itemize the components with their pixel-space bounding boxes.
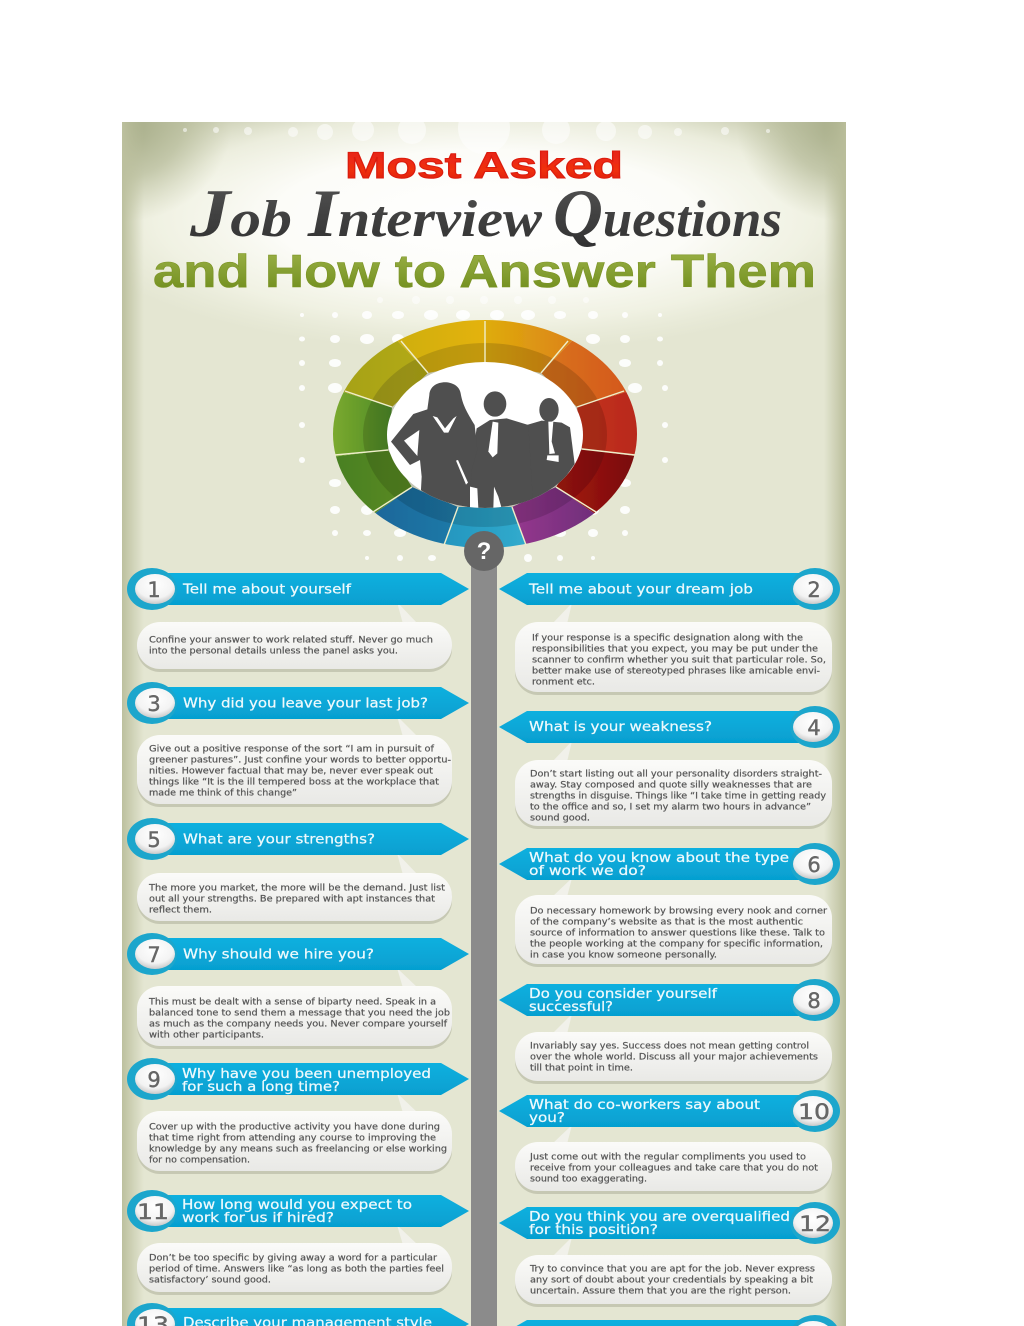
- answer bubble 1: [137, 602, 452, 672]
- answer bubble 11: Don’t be too specific by giving away a word for a particular: [149, 1252, 437, 1264]
- question banner 12: Do you think you are overqualified: [529, 1210, 790, 1225]
- answer bubble 8: [515, 1014, 832, 1084]
- card 7: [127, 933, 469, 1049]
- answer bubble 8: over the whole world. Discuss all your major achievements: [530, 1052, 818, 1062]
- decorative white dot field: [299, 310, 668, 562]
- title: Job Interview Questions: Questions: [553, 175, 782, 251]
- question banner 8: [499, 979, 840, 1021]
- question banner 4: What is your weakness?: [529, 719, 712, 735]
- card 14: [499, 1315, 840, 1326]
- icon: business people silhouettes: [391, 382, 575, 508]
- question banner 11: 11: [137, 1200, 169, 1224]
- answer bubble 6: in case you know someone personally.: [530, 950, 717, 960]
- answer bubble 8: till that point in time.: [530, 1062, 633, 1074]
- answer bubble 2: better make use of stereotyped phrases like amicable envi-: [532, 666, 820, 676]
- answer bubble 4: Don’t start listing out all your personality disorders straight-: [530, 768, 822, 780]
- answer bubble 3: things like “It is the ill tempered boss at the workplace that: [149, 776, 439, 788]
- title: Job Interview Questions: Interview: [307, 175, 542, 251]
- icon: question mark badge: ?: [477, 538, 491, 565]
- answer bubble 3: nities. However factual that may be, never ever speak out: [149, 766, 433, 776]
- question banner 2: 2: [807, 578, 821, 602]
- answer bubble 10: Just come out with the regular compliments you used to: [529, 1152, 806, 1162]
- question banner 6: of work we do?: [529, 864, 646, 879]
- question banner 1: [127, 568, 469, 610]
- question banner 12: for this position?: [529, 1223, 658, 1238]
- answer bubble 9: Cover up with the productive activity you have done during: [149, 1122, 440, 1132]
- answer bubble 2: scanner to confirm whether you suit that particular role. So,: [532, 654, 826, 666]
- question banner 8: 8: [807, 989, 821, 1013]
- question banner 9: Why have you been unemployed: [182, 1067, 431, 1082]
- answer bubble 3: made me think of this change”: [149, 788, 297, 798]
- question banner 14: [499, 1315, 840, 1326]
- card 10: [499, 1090, 840, 1194]
- answer bubble 3: Give out a positive response of the sort “I am in pursuit of: [149, 744, 435, 754]
- answer bubble 4: strengths in disguise. Things like “I take time in getting ready: [530, 790, 827, 802]
- card 3: [127, 682, 469, 807]
- answer bubble 7: [137, 968, 452, 1049]
- answer bubble 4: away. Stay composed and quote silly weaknesses that are: [530, 780, 812, 790]
- answer bubble 2: ronment etc.: [532, 676, 595, 688]
- answer bubble 7: with other participants.: [149, 1030, 264, 1040]
- question banner 6: [499, 843, 840, 885]
- panel: infographic background: [122, 122, 846, 1326]
- answer bubble 8: Invariably say yes. Success does not mean getting control: [530, 1040, 809, 1052]
- center pole: [471, 560, 497, 1326]
- card 11: [127, 1190, 469, 1295]
- answer bubble 7: balanced tone to send them a message that you need the job: [149, 1008, 450, 1018]
- answer bubble 6: source of information to answer questions like these. Talk to: [530, 928, 825, 938]
- question banner 2: Tell me about your dream job: [528, 582, 753, 598]
- question banner 7: [127, 933, 469, 975]
- question banner 4: 4: [807, 716, 821, 740]
- question banner 3: [127, 682, 469, 724]
- answer bubble 5: [137, 853, 452, 924]
- answer bubble 3: greener pastures”. Just confine your words to better opportu-: [149, 754, 451, 766]
- answer bubble 9: that time right from attending any course to improving the: [149, 1132, 436, 1144]
- question banner 11: How long would you expect to: [182, 1198, 412, 1213]
- answer bubble 11: [137, 1225, 452, 1295]
- answer bubble 2: If your response is a specific designation along with the: [532, 632, 803, 644]
- question banner 8: Do you consider yourself: [529, 987, 717, 1002]
- title: Job Interview Questions: Job: [189, 175, 292, 251]
- answer bubble 12: Try to convince that you are apt for the job. Never express: [529, 1264, 815, 1274]
- question banner 3: 3: [147, 692, 161, 716]
- answer bubble 9: knowledge by any means such as freelancing or else working: [149, 1144, 447, 1154]
- answer bubble 6: Do necessary homework by browsing every nook and corner: [530, 906, 827, 916]
- title: Most Asked: Most Asked: [345, 145, 623, 186]
- question banner 4: [499, 706, 840, 748]
- answer bubble 9: for no compensation.: [149, 1154, 250, 1166]
- question banner 13: [127, 1303, 469, 1326]
- answer bubble 4: [515, 741, 832, 829]
- card 6: [499, 843, 840, 967]
- answer bubble 2: [515, 603, 832, 695]
- answer bubble 12: [515, 1237, 832, 1307]
- question banner 5: 5: [147, 828, 161, 852]
- answer bubble 7: This must be dealt with a sense of biparty need. Speak in a: [148, 996, 436, 1008]
- card 9: [127, 1058, 469, 1174]
- card 4: [499, 706, 840, 829]
- answer bubble 10: sound too exaggerating.: [530, 1174, 647, 1184]
- card 5: [127, 818, 469, 924]
- question banner 3: Why did you leave your last job?: [183, 696, 428, 712]
- question banner 7: 7: [147, 943, 161, 967]
- answer bubble 1: into the personal details unless the panel asks you.: [149, 646, 398, 656]
- question banner 6: What do you know about the type: [529, 851, 789, 866]
- title: Job Interview Questions: [189, 175, 782, 251]
- answer bubble 10: [515, 1125, 832, 1194]
- answer bubble 7: as much as the company needs you. Never compare yourself: [149, 1018, 448, 1030]
- card 12: [499, 1202, 840, 1307]
- question banner 12: 12: [799, 1212, 831, 1236]
- question banner 1: Tell me about yourself: [182, 582, 352, 598]
- card 2: [499, 568, 840, 695]
- question banner 9: 9: [147, 1068, 161, 1092]
- question banner 5: [127, 818, 469, 860]
- question banner 5: What are your strengths?: [183, 832, 375, 848]
- colour wheel with silhouettes: [333, 320, 637, 548]
- answer bubble 12: any sort of doubt about your credentials by speaking a bit: [530, 1274, 813, 1286]
- answer bubble 5: reflect them.: [149, 904, 212, 916]
- answer bubble 4: to the office and so, I set my alarm two hours in advance”: [530, 802, 811, 812]
- question banner 8: successful?: [529, 1000, 613, 1015]
- card 1: [127, 568, 469, 672]
- answer bubble 1: Confine your answer to work related stuff. Never go much: [149, 634, 433, 646]
- answer bubble 3: [137, 716, 452, 807]
- answer bubble 10: receive from your colleagues and take care that you do not: [530, 1162, 818, 1174]
- question banner 10: you?: [529, 1111, 565, 1126]
- answer bubble 5: The more you market, the more will be the demand. Just list: [148, 882, 445, 894]
- answer bubble 11: satisfactory’ sound good.: [149, 1274, 271, 1286]
- question banner 1: 1: [147, 578, 161, 602]
- question banner 11: [127, 1190, 469, 1232]
- question banner 12: [499, 1202, 840, 1244]
- question banner 7: Why should we hire you?: [183, 946, 374, 962]
- answer bubble 11: period of time. Answers like “as long as both the parties feel: [149, 1264, 444, 1274]
- question banner 2: [499, 568, 840, 610]
- card 13: [127, 1303, 469, 1326]
- answer bubble 4: sound good.: [530, 812, 590, 824]
- icon: question mark badge: [464, 531, 504, 571]
- question banner 9: [127, 1058, 469, 1100]
- question banner 11: work for us if hired?: [182, 1211, 334, 1226]
- answer bubble 6: [515, 878, 832, 967]
- answer bubble 2: responsibilities that you expect, you may be put under the: [532, 644, 818, 654]
- question banner 10: 10: [798, 1100, 830, 1124]
- answer bubble 6: the people working at the company for specific information,: [530, 938, 823, 950]
- answer bubble 6: of the company’s website as that is the most authentic: [530, 916, 803, 928]
- question banner 9: for such a long time?: [182, 1080, 340, 1095]
- answer bubble 9: [137, 1093, 452, 1174]
- answer bubble 12: uncertain. Assure them that you are the right person.: [530, 1286, 791, 1296]
- title: and How to Answer Them: and How to Answer Them: [153, 245, 816, 297]
- question banner 10: [499, 1090, 840, 1132]
- answer bubble 5: out all your strengths. Be prepared with apt instances that: [149, 894, 435, 904]
- question banner 6: 6: [807, 853, 821, 877]
- question banner 10: What do co-workers say about: [529, 1098, 760, 1113]
- card 8: [499, 979, 840, 1084]
